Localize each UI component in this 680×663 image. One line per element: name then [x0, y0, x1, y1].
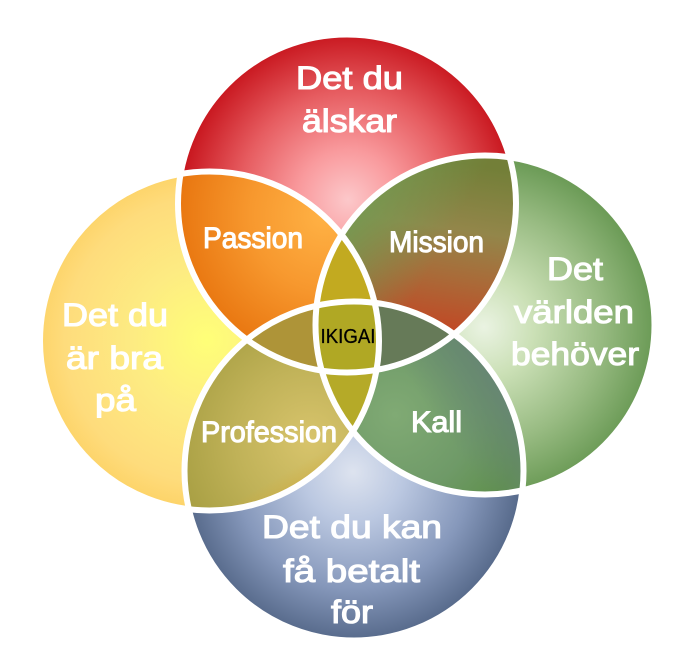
label: IKIGAI: IKIGAI — [320, 326, 376, 348]
circle: Det världen behöver (green) — [316, 156, 654, 494]
heading: Det du är bra på: är bra — [66, 340, 163, 376]
heading: Det du kan få betalt för: få betalt — [283, 553, 420, 589]
heading: Det du är bra på — [62, 297, 168, 418]
overlap: bottom triple lens — [326, 374, 373, 426]
label: Kall: Kall — [411, 406, 462, 439]
heading: Det världen behöver: världen — [514, 294, 634, 330]
heading: Det du kan få betalt för: för — [331, 594, 373, 630]
heading: Det du älskar: älskar — [302, 103, 397, 139]
heading: Det du älskar: Det du — [296, 60, 403, 96]
heading: Det du kan få betalt för: Det du kan — [262, 509, 442, 545]
heading: Det du är bra på: på — [95, 382, 136, 418]
heading: Det världen behöver — [511, 251, 639, 372]
label: Profession: Profession — [201, 416, 337, 449]
overlap: Passion — [181, 174, 338, 336]
circle: Det du kan få betalt för (blue) — [184, 302, 524, 640]
label: Mission: Mission — [389, 226, 484, 259]
overlap: Mission — [346, 158, 513, 330]
heading: Det världen behöver: Det — [547, 251, 603, 287]
heading: Det du älskar — [296, 60, 403, 139]
overlap: Profession — [188, 344, 350, 508]
overlap: Kall — [357, 338, 520, 492]
heading: Det du kan få betalt för — [262, 509, 442, 630]
overlap: right triple lens — [378, 306, 449, 366]
heading: Det världen behöver: behöver — [511, 336, 639, 372]
circle: Det du är bra på (yellow) — [40, 172, 379, 510]
heading: Det du är bra på: Det du — [62, 297, 168, 333]
label: Passion: Passion — [203, 222, 303, 255]
overlap: top triple lens — [320, 240, 371, 302]
overlap: left triple lens — [252, 310, 318, 367]
circle: Det du älskar (red) — [178, 34, 516, 372]
